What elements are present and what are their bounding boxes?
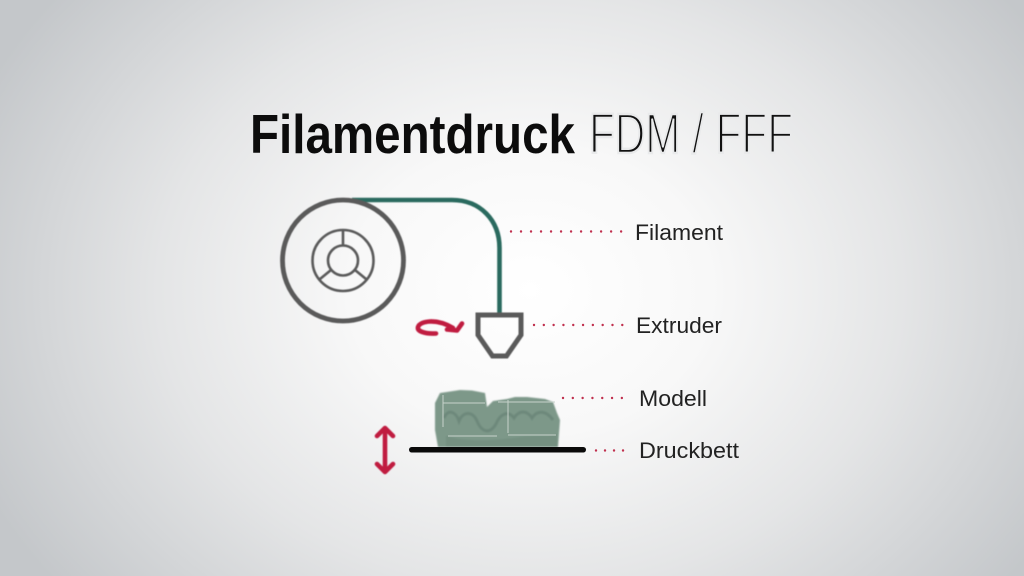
leader: Filament (511, 230, 623, 233)
label: Modell: Modell (639, 386, 707, 411)
title: bold part: Filamentdruck (250, 103, 575, 165)
title: light part: FDM / FFF (589, 102, 793, 166)
leader: Druckbett (596, 449, 624, 452)
icon: extruder nozzle (478, 315, 521, 356)
title (250, 102, 793, 166)
leader: Modell (563, 397, 624, 399)
print bed (409, 447, 586, 452)
label: Druckbett: Druckbett (639, 438, 739, 463)
icon: up-down arrow (377, 428, 393, 472)
diagram: spool, filament and extruder (282, 200, 521, 356)
leader: Extruder (534, 324, 623, 326)
icon: printed model (435, 390, 560, 447)
icon: spool (282, 200, 404, 321)
filament line (352, 200, 500, 315)
label: Extruder: Extruder (636, 313, 722, 338)
label: Filament: Filament (635, 220, 723, 245)
icon: rotation arrow (418, 321, 462, 334)
